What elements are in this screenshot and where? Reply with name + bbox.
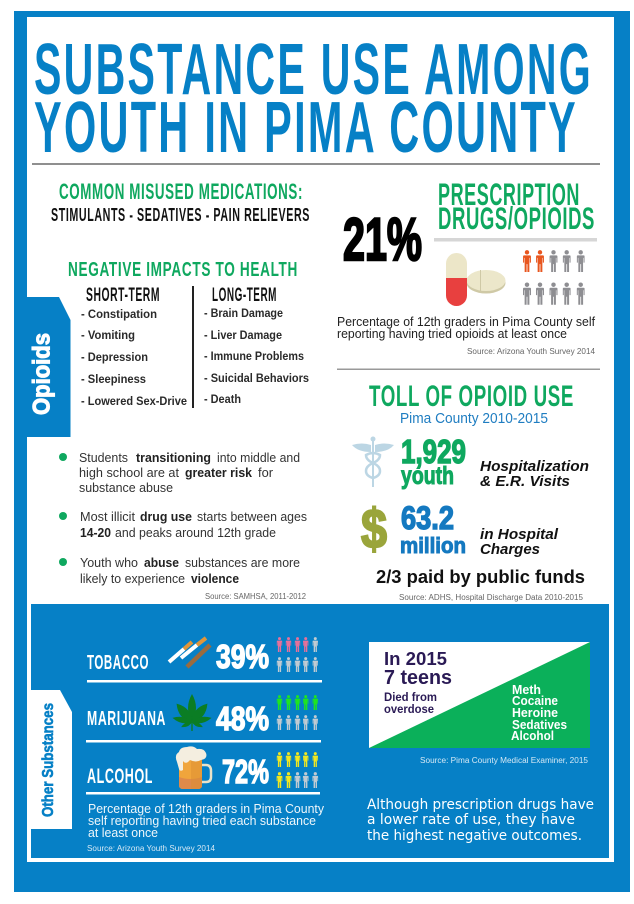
- caption: substance percentages: [87, 801, 324, 853]
- panel: negative impacts to health: [68, 258, 309, 408]
- row: alcohol: ALCOHOL: [87, 765, 153, 788]
- stat: 21 percent: 21%: [343, 206, 422, 273]
- caption: substance percentages: at least once: [88, 825, 158, 840]
- label: hospitalization: [480, 459, 589, 490]
- stat: 1,929 youth: youth: [401, 462, 454, 490]
- label: hospitalization: & E.R. Visits: [480, 474, 570, 490]
- bullet list: risk factors: Youth who: [80, 555, 138, 570]
- row: tobacco: 39%: [216, 638, 269, 675]
- tab: opioids: Opioids: [28, 333, 56, 415]
- bullet list: risk factors: Source: SAMHSA, 2011-2012: [205, 592, 307, 601]
- heading: toll of opioid use: [369, 380, 574, 427]
- text: conclusion: the highest negative outcomes.: [367, 828, 582, 844]
- caption: opioid percentage: reporting having tried opioids at least once: [337, 327, 567, 341]
- bullet list: risk factors: substances are more: [185, 555, 300, 570]
- text: conclusion: a lower rate of use, they have: [367, 812, 575, 828]
- icon: dollar sign: $: [361, 497, 387, 560]
- icon: beer mug: [176, 746, 211, 789]
- bullet list: risk factors: Most illicit: [80, 509, 135, 524]
- caption: substance percentages: Percentage of 12th graders in Pima County: [88, 801, 324, 816]
- stat: 1,929 youth: [401, 433, 466, 490]
- panel: negative impacts to health: LONG-TERM: [212, 285, 277, 306]
- heading: toll of opioid use: Pima County 2010-2015: [400, 411, 548, 427]
- bullet list: risk factors: abuse: [144, 555, 179, 570]
- pictogram: alcohol: [277, 752, 318, 788]
- bullet list: risk factors: high school are at: [79, 465, 179, 480]
- bullet list: risk factors: drug use: [140, 509, 192, 524]
- label: hospitalization: Hospitalization: [480, 459, 589, 475]
- callout: teen overdoses: Heroine: [512, 706, 558, 720]
- label: hospital charges: Charges: [480, 542, 540, 558]
- label: hospital charges: [480, 527, 559, 558]
- stat: 63.2 million: [400, 500, 466, 558]
- callout: teen overdoses: Died from: [384, 690, 437, 704]
- panel: negative impacts to health: - Constipation: [81, 309, 157, 321]
- row: marijuana: 48%: [216, 700, 269, 737]
- bullet list: risk factors: and peaks around 12th grade: [115, 525, 276, 540]
- callout: teen overdoses: Alcohol: [511, 729, 554, 743]
- panel: negative impacts to health: - Depression: [81, 352, 148, 364]
- bullet list: risk factors: 14-20: [80, 525, 111, 540]
- bullet list: risk factors: transitioning: [136, 450, 211, 465]
- icon: cannabis leaf: [172, 694, 212, 731]
- panel: negative impacts to health: NEGATIVE IMPACTS TO HEALTH: [68, 258, 298, 281]
- caption: opioid percentage: Source: Arizona Youth Survey 2014: [467, 347, 596, 356]
- label: hospital charges: in Hospital: [480, 527, 559, 543]
- panel: other substances: [31, 604, 609, 858]
- callout: teen overdoses: Meth: [512, 683, 541, 697]
- row: alcohol: 72%: [222, 753, 269, 790]
- heading: common misused medications: STIMULANTS - SEDATIVES - PAIN RELIEVERS: [51, 205, 310, 225]
- text: public funds: 2/3 paid by public funds: [376, 566, 585, 587]
- caption: substance percentages: self reporting having tried each substance: [88, 813, 316, 828]
- panel: negative impacts to health: - Lowered Sex-Drive: [81, 396, 187, 408]
- heading: common misused medications: [51, 179, 310, 225]
- callout: teen overdoses: Cocaine: [512, 694, 558, 708]
- icon: pills: [446, 253, 506, 306]
- callout: teen overdoses: Sedatives: [512, 718, 567, 732]
- bullet list: risk factors: likely to experience: [80, 571, 185, 586]
- bullet list: risk factors: greater risk: [185, 465, 253, 480]
- stat: 63.2 million: million: [400, 533, 466, 558]
- text: conclusion: [367, 797, 594, 844]
- panel: negative impacts to health: - Death: [204, 394, 241, 406]
- title: [34, 29, 593, 168]
- bullet list: risk factors: into middle and: [217, 450, 300, 465]
- text: conclusion: Although prescription drugs have: [367, 797, 594, 813]
- panel: negative impacts to health: SHORT-TERM: [86, 285, 160, 306]
- icon: cigarettes: [169, 638, 210, 667]
- row: marijuana: MARIJUANA: [87, 707, 166, 730]
- bullet list: risk factors: Students: [79, 450, 128, 465]
- bullet list: risk factors: violence: [191, 571, 239, 586]
- row: tobacco: TOBACCO: [87, 651, 149, 674]
- panel: negative impacts to health: - Sleepiness: [81, 374, 146, 386]
- source: medical examiner: Source: Pima County Medical Examiner, 2015: [420, 756, 589, 765]
- callout: teen overdoses: [369, 642, 590, 748]
- stat: 63.2 million: 63.2: [401, 500, 454, 536]
- bullet list: risk factors: substance abuse: [79, 480, 173, 495]
- bullet list: risk factors: for: [258, 465, 274, 480]
- caption: substance percentages: Source: Arizona Youth Survey 2014: [87, 844, 216, 853]
- row: marijuana: [86, 694, 321, 742]
- pictogram: tobacco: [277, 637, 318, 672]
- heading: common misused medications: COMMON MISUSED MEDICATIONS:: [59, 179, 303, 204]
- panel: negative impacts to health: - Suicidal Behaviors: [204, 373, 309, 385]
- pictogram: 2 of 10 highlighted: [523, 250, 585, 305]
- tab: other substances: Other Substances: [40, 703, 57, 817]
- panel: negative impacts to health: - Brain Damage: [204, 308, 283, 320]
- caption: opioid percentage: [337, 315, 596, 356]
- panel: negative impacts to health: - Liver Damage: [204, 330, 282, 342]
- bullet list: risk factors: starts between ages: [197, 509, 307, 524]
- icon: caduceus: [352, 436, 394, 487]
- callout: teen overdoses: overdose: [384, 702, 434, 716]
- callout: teen overdoses: In 2015: [384, 649, 447, 669]
- stat: 1,929 youth: 1,929: [401, 433, 466, 470]
- tab: opioids: [14, 297, 70, 437]
- row: tobacco: [87, 637, 322, 682]
- bullet list: risk factors: [59, 450, 307, 601]
- panel: negative impacts to health: - Immune Problems: [204, 351, 304, 363]
- panel: negative impacts to health: - Vomiting: [81, 330, 135, 342]
- heading: prescription drugs/opioids: [434, 176, 597, 242]
- caption: opioid percentage: Percentage of 12th graders in Pima County self: [337, 315, 596, 329]
- row: alcohol: [86, 746, 320, 794]
- callout: teen overdoses: 7 teens: [384, 667, 452, 689]
- tab: other substances: [31, 690, 72, 829]
- source: ADHS: Source: ADHS, Hospital Discharge Data 2010-2015: [399, 593, 584, 602]
- pictogram: marijuana: [277, 695, 318, 730]
